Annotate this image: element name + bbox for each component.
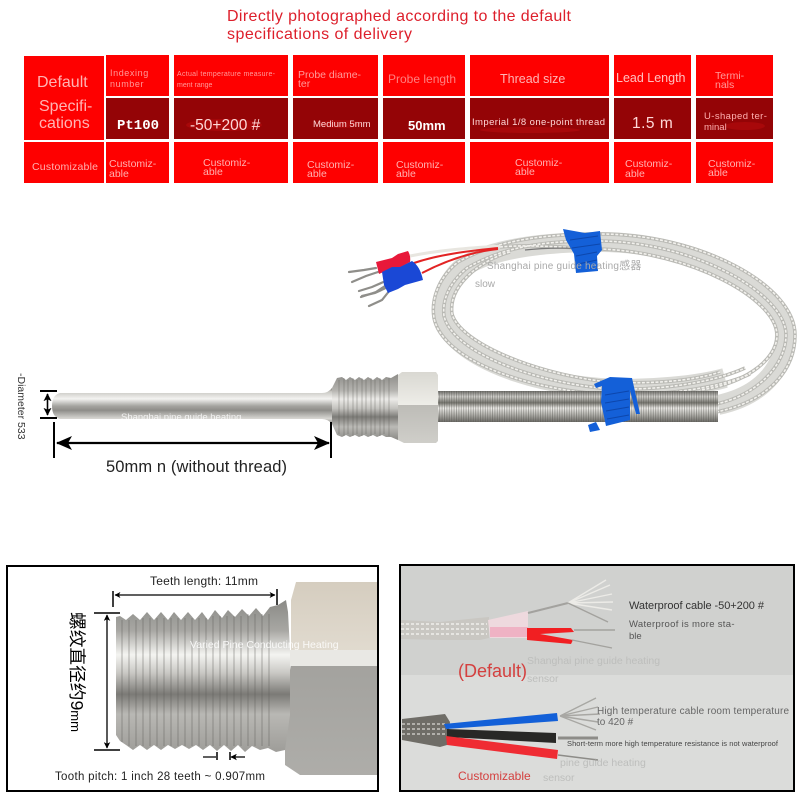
title: Directly photographed according to the default — [227, 8, 572, 25]
customizable row: Customiz- — [307, 159, 355, 171]
default values: Pt100 — [117, 118, 159, 134]
default values: Medium 5mm — [313, 119, 371, 130]
panel: cable types — [400, 565, 794, 791]
header labels: Thread size — [500, 72, 565, 86]
specification table — [24, 55, 773, 183]
row label: default specifications: Default — [37, 74, 88, 91]
thread diameter dimension — [67, 612, 120, 750]
customizable row: able — [203, 166, 223, 178]
length dimension: 50mm n (without thread) — [106, 458, 287, 476]
waterproof cable notes — [629, 600, 765, 642]
stepped spring tube — [438, 391, 718, 422]
cable watermark — [475, 259, 642, 290]
header labels: Probe diame- — [298, 69, 362, 81]
cable watermark: Shanghai pine guide heating感器 — [487, 259, 642, 272]
header labels: ter — [298, 78, 311, 90]
title — [227, 8, 572, 43]
product photo: sensor with cable — [15, 229, 795, 476]
customizable row: able — [708, 167, 728, 179]
header labels: ment range — [177, 82, 213, 89]
tooth pitch dimension: Tooth pitch: 1 inch 28 teeth ~ 0.907mm — [55, 771, 265, 783]
customizable row: able — [625, 168, 645, 180]
customizable row: Customiz- — [396, 159, 444, 171]
panel watermark: sensor — [543, 772, 575, 784]
blue tie on spring — [588, 377, 640, 432]
thread close-up — [116, 600, 290, 752]
title: specifications of delivery — [227, 26, 412, 43]
default specification row — [106, 98, 773, 139]
header labels: Actual temperature measure- — [177, 71, 276, 78]
row label: default specifications — [37, 74, 92, 132]
default values: 50mm — [408, 118, 446, 133]
customizable row: able — [307, 168, 327, 180]
customizable row: Customiz- — [625, 158, 673, 170]
row label: default specifications: Specifi- — [39, 98, 92, 115]
diameter callout — [15, 373, 57, 440]
header labels: Lead Length — [616, 71, 686, 85]
customizable label: Customizable — [458, 769, 531, 783]
lead wires — [410, 246, 500, 273]
high temperature cable notes: Short-term more high temperature resistance is not waterproof — [567, 739, 779, 748]
fork terminals — [349, 268, 390, 306]
thread watermark: Varied Pine Conducting Heating — [190, 639, 339, 651]
header labels: number — [110, 79, 144, 89]
threaded section — [332, 374, 398, 440]
default values: 1.5 m — [632, 115, 673, 132]
panel watermark — [527, 655, 660, 784]
waterproof cable illustration — [401, 580, 615, 648]
probe rod — [52, 388, 332, 424]
default values: -50+200 # — [190, 117, 261, 134]
waterproof cable notes: ble — [629, 631, 642, 642]
blue tie on top of cable — [563, 229, 602, 273]
header labels — [110, 68, 745, 91]
customizable row: Customiz- — [515, 157, 563, 169]
header labels: Termi- — [715, 70, 745, 82]
panel watermark: Shanghai pine guide heating — [527, 655, 660, 667]
customizable row: Customiz- — [109, 158, 157, 170]
tooth pitch dimension — [55, 752, 265, 783]
coiled braided cable — [433, 234, 795, 412]
header labels: Indexing — [110, 68, 149, 78]
customizable row: able — [515, 166, 535, 178]
diameter callout: -Diameter 533 — [15, 373, 27, 440]
hex nut close-up — [284, 582, 377, 775]
panel watermark: pine guide heating — [560, 757, 646, 769]
customizable row: Customiz- — [708, 158, 756, 170]
header labels: nals — [715, 79, 734, 91]
teeth length dimension: Teeth length: 11mm — [150, 574, 258, 588]
default values: Imperial 1/8 one-point thread — [472, 117, 605, 128]
high temperature cable notes: High temperature cable room temperature — [597, 706, 789, 717]
lower photo background — [401, 675, 793, 790]
high temperature cable notes: to 420 # — [597, 717, 634, 728]
thread diameter dimension: 螺纹直径约 9 mm — [67, 612, 87, 732]
customizable row: able — [109, 168, 129, 180]
panel watermark: sensor — [527, 673, 559, 685]
default values: minal — [704, 122, 727, 133]
watermark on probe: Shanghai pine guide heating — [121, 412, 241, 423]
high temperature cable notes — [567, 706, 789, 748]
header labels: Probe length — [388, 72, 456, 86]
length dimension — [54, 422, 331, 476]
teeth length dimension — [113, 574, 277, 607]
customizable row: Customiz- — [203, 157, 251, 169]
red crimp connector — [376, 251, 410, 274]
high temperature cable illustration — [402, 698, 600, 760]
waterproof cable notes: Waterproof cable -50+200 # — [629, 600, 765, 612]
customizable row — [32, 157, 756, 180]
ink smudges in default row — [186, 119, 765, 133]
customizable row: Customizable — [32, 161, 98, 173]
panel: thread close-up — [7, 566, 378, 791]
hex nut — [398, 372, 438, 443]
default values: U-shaped ter- — [704, 111, 767, 122]
default values — [117, 111, 767, 134]
cable watermark: slow — [475, 279, 496, 290]
customizable row: able — [396, 168, 416, 180]
table cell backgrounds — [24, 55, 773, 183]
default label: (Default) — [458, 661, 527, 681]
blue crimp connector — [382, 261, 423, 293]
waterproof cable notes: Waterproof is more sta- — [629, 619, 735, 630]
row label: default specifications: cations — [39, 115, 90, 132]
